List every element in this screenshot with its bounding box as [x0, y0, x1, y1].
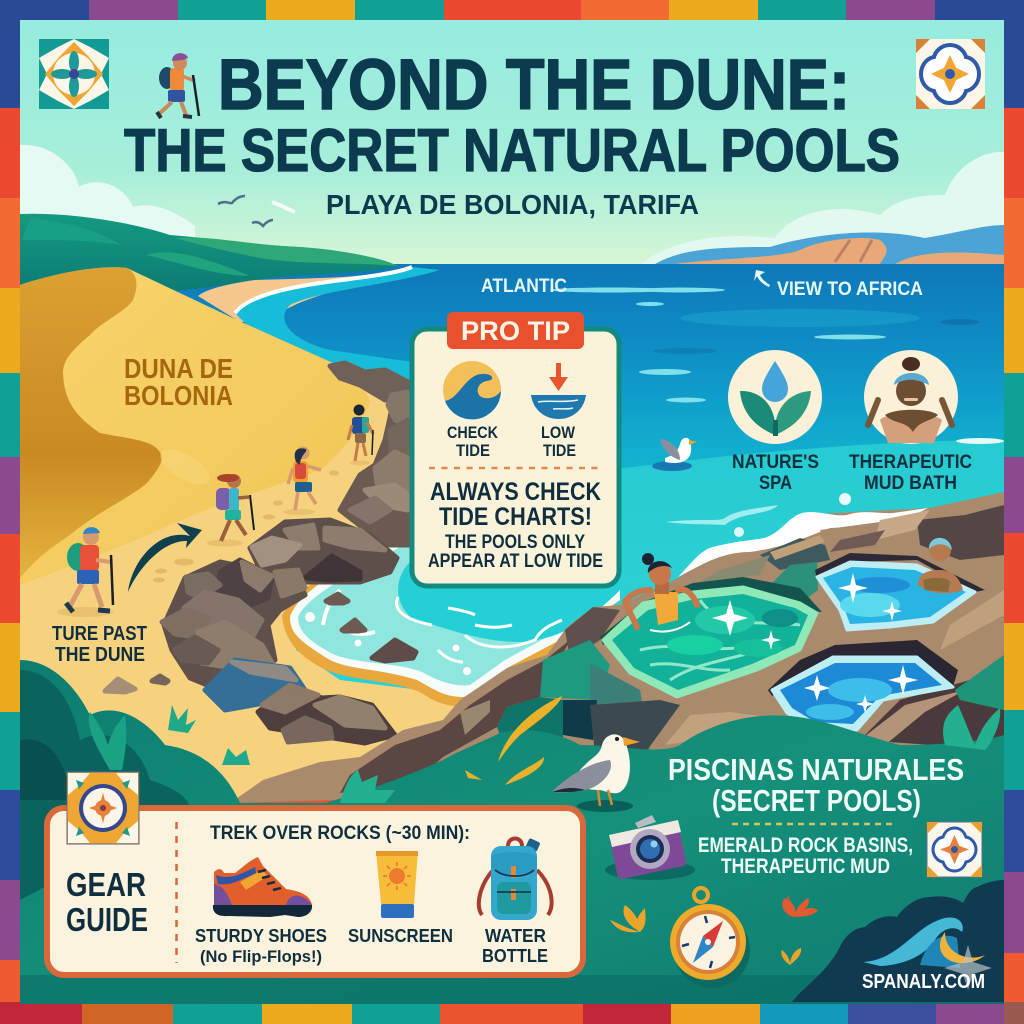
- water bottle label: BOTTLE: [482, 946, 548, 966]
- pro tip badge: PRO TIP: [461, 316, 570, 346]
- tile: gear guide: [67, 772, 139, 844]
- upper blue pool: [815, 553, 985, 630]
- secret pools description: EMERALD ROCK BASINS,: [698, 834, 913, 857]
- icon: title hiker: [157, 53, 199, 118]
- trail caption: THE DUNE: [55, 644, 145, 666]
- lower blue pool: [768, 640, 958, 730]
- dune label: BOLONIA: [124, 380, 233, 411]
- sturdy shoes label: (No Flip-Flops!): [200, 947, 322, 966]
- title: [124, 46, 900, 184]
- mud bath label: MUD BATH: [864, 473, 957, 494]
- nature's spa label: NATURE'S: [732, 452, 819, 473]
- pro tip message: THE POOLS ONLY: [445, 532, 585, 553]
- icon: compass: [670, 888, 750, 988]
- tile: top left: [39, 39, 109, 109]
- seagull on rocks: [552, 734, 640, 812]
- dune label: [124, 353, 233, 411]
- view to Africa label with arrow: [754, 270, 923, 300]
- nature's spa label: [732, 452, 819, 494]
- view to Africa label with arrow: VIEW TO AFRICA: [777, 279, 923, 300]
- coastal rocks: [105, 363, 416, 743]
- gear guide heading: GEAR: [66, 866, 146, 903]
- rock shelf around pools: [230, 492, 1004, 803]
- tile: secret pools: [927, 822, 982, 877]
- gear guide heading: GUIDE: [66, 901, 148, 938]
- clouds left: [20, 145, 195, 250]
- water bottle label: [482, 926, 548, 966]
- pro tip badge: [447, 312, 584, 349]
- check tide label: TIDE: [456, 441, 490, 460]
- panel: pro tip: [412, 312, 619, 586]
- mud bath label: [849, 452, 972, 494]
- check tide label: CHECK: [447, 423, 499, 442]
- leaf sprigs: [610, 895, 818, 965]
- bather woman: [625, 553, 697, 632]
- seagull on water: [652, 438, 697, 471]
- logo wordmark: SPANALY.COM: [862, 971, 985, 993]
- trail caption: [52, 623, 147, 666]
- trek note: TREK OVER ROCKS (~30 MIN):: [210, 823, 470, 844]
- low tide label: [541, 423, 576, 460]
- hiker 3: [283, 446, 321, 515]
- title: BEYOND THE DUNE:: [218, 46, 850, 125]
- tile: top right: [916, 39, 985, 109]
- main sand and dune: [20, 267, 500, 800]
- dune label: DUNA DE: [124, 353, 233, 384]
- peach beach strip: [198, 266, 412, 322]
- sea: [20, 264, 1004, 704]
- pro tip message: ALWAYS CHECK: [430, 478, 601, 506]
- icon: mud bath: [864, 350, 958, 444]
- pro tip message: APPEAR AT LOW TIDE: [428, 551, 603, 572]
- secret pools description: [698, 834, 913, 878]
- panel: gear guide: [47, 772, 583, 975]
- hiker 4: [348, 404, 373, 466]
- bay with foam: [235, 267, 440, 400]
- icon: check tide wave: [443, 361, 501, 419]
- green headland: [20, 214, 398, 295]
- sturdy shoes label: STURDY SHOES: [195, 926, 327, 946]
- icon: sunscreen: [376, 851, 418, 918]
- secret pools heading: [668, 752, 964, 818]
- secret pools heading: (SECRET POOLS): [712, 783, 921, 818]
- low tide label: LOW: [541, 423, 576, 442]
- atlantic label: ATLANTIC: [481, 276, 567, 297]
- pro tip message: TIDE CHARTS!: [439, 503, 592, 531]
- foreground plants: [89, 705, 1000, 803]
- mud bath label: THERAPEUTIC: [849, 452, 972, 473]
- logo: spanaly wave: [792, 880, 1004, 1002]
- clouds right: [640, 152, 1004, 266]
- nature's spa label: SPA: [759, 473, 792, 494]
- emerald pool: [600, 577, 822, 697]
- gear guide heading: [66, 866, 148, 938]
- secret pools heading: PISCINAS NATURALES: [668, 752, 964, 787]
- check tide label: [447, 423, 499, 460]
- sunscreen label: SUNSCREEN: [348, 926, 453, 946]
- trail caption: TURE PAST: [52, 623, 147, 645]
- yellow reeds: [465, 696, 562, 785]
- pro tip message: [428, 478, 603, 572]
- icon: low tide arrow: [531, 363, 586, 419]
- secret pools description: THERAPEUTIC MUD: [721, 855, 890, 878]
- trail arrow: [128, 523, 202, 592]
- sky background: [20, 20, 1004, 266]
- hiker 1: [57, 527, 113, 617]
- distant mountains: view to Africa: [655, 225, 1004, 264]
- title: THE SECRET NATURAL POOLS: [124, 117, 900, 184]
- sturdy shoes label: [195, 926, 327, 966]
- bather man: [918, 538, 963, 593]
- icon: hiking boot: [213, 857, 312, 917]
- sea highlights: [550, 288, 1004, 620]
- shoreline water and foam: [282, 520, 620, 706]
- birds: [218, 196, 295, 226]
- icon: camera: [605, 815, 695, 880]
- low tide label: TIDE: [543, 441, 576, 460]
- water bottle label: WATER: [485, 926, 546, 946]
- icon: backpack: [479, 838, 552, 920]
- subtitle: PLAYA DE BOLONIA, TARIFA: [326, 189, 699, 220]
- green foreground: [20, 660, 1004, 1004]
- hiker 2: [207, 474, 254, 546]
- icon: nature's spa: [728, 350, 822, 444]
